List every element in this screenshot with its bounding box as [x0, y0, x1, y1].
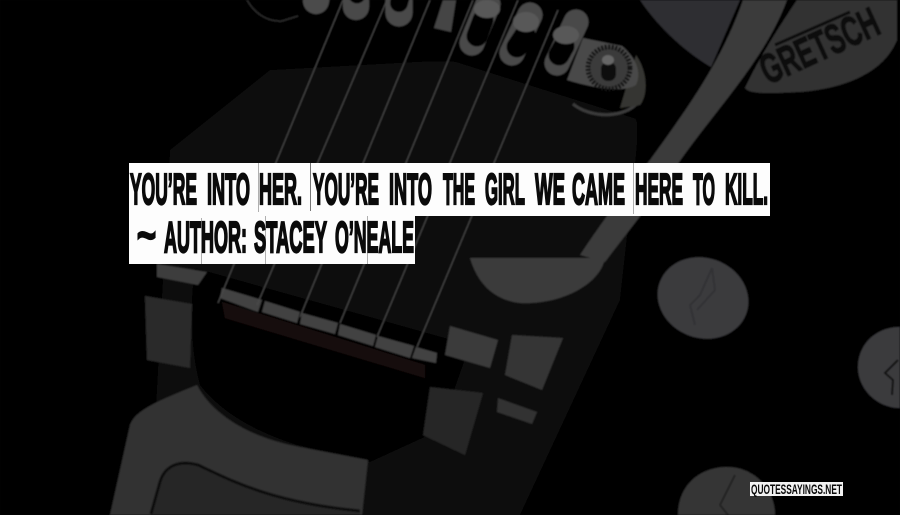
- lower left pickguard: [110, 385, 368, 515]
- knob two emblem: [885, 360, 898, 395]
- lower right block: [497, 398, 537, 424]
- plate lettering ring: [588, 47, 630, 89]
- quote text: CAME: [572, 165, 625, 214]
- lower block: [423, 387, 483, 455]
- quote line two white band: [129, 215, 415, 264]
- Gretsch badge disc: [745, 0, 897, 93]
- bridge saddle bar: [220, 288, 437, 363]
- quote text: THE: [443, 165, 475, 214]
- quote text: HER.: [259, 165, 302, 214]
- pickguard inset border: [151, 463, 360, 514]
- control knob two: [858, 327, 900, 408]
- Gretsch badge underline: [775, 12, 850, 45]
- tremolo plate shadow crescent: [573, 100, 640, 115]
- lower knob emblem: [720, 475, 735, 515]
- watermark: QUOTESSAYINGS.NET: [751, 481, 842, 497]
- quote text: HERE: [635, 165, 683, 214]
- quote text: GIRL: [485, 165, 525, 214]
- bridge shadow saddles: [222, 302, 425, 378]
- left bridge block: [145, 296, 192, 368]
- quote panel: O’NEALE: [335, 213, 414, 262]
- author attribution: ~: [137, 211, 156, 260]
- lump at string anchor: [470, 258, 605, 303]
- quote text: [130, 165, 768, 214]
- watermark: [750, 481, 843, 497]
- quote text: TO: [693, 165, 715, 214]
- quote line one white band: [129, 163, 770, 216]
- quote text: INTO: [207, 165, 250, 214]
- author attribution: AUTHOR:: [164, 213, 247, 262]
- bridge end block: [445, 326, 498, 368]
- lower knob: [678, 467, 775, 515]
- tremolo plate with screw: [567, 38, 638, 89]
- upper grey panel: [640, 0, 740, 67]
- bridge right block: [505, 335, 563, 390]
- pickguard inset: [151, 463, 360, 515]
- control knob one: [656, 256, 750, 340]
- pickup pole pieces: [316, 0, 576, 63]
- author attribution: STACEY: [254, 213, 327, 262]
- diagonal metal strip: [580, 0, 787, 262]
- guitar body dark tone: [150, 60, 640, 515]
- pickup ring arc: [247, 0, 298, 21]
- plate screw: [601, 62, 616, 81]
- pole piece tops: [474, 0, 579, 44]
- text: KILL.: [725, 165, 768, 214]
- left bridge mount: [157, 264, 207, 285]
- quote panel: [129, 163, 770, 264]
- spring coil: [468, 280, 530, 335]
- strings: [218, 0, 558, 347]
- quote text: YOU’RE: [130, 165, 197, 214]
- pickup tag: [434, 0, 456, 32]
- quote text: YOU’RE: [313, 165, 379, 214]
- quote text: INTO: [389, 165, 432, 214]
- quote text: WE: [535, 165, 565, 214]
- bridge shadow: [192, 268, 470, 462]
- knob one emblem: [690, 268, 715, 325]
- tremolo plate right edge: [620, 55, 646, 108]
- plate screw head: [602, 55, 614, 65]
